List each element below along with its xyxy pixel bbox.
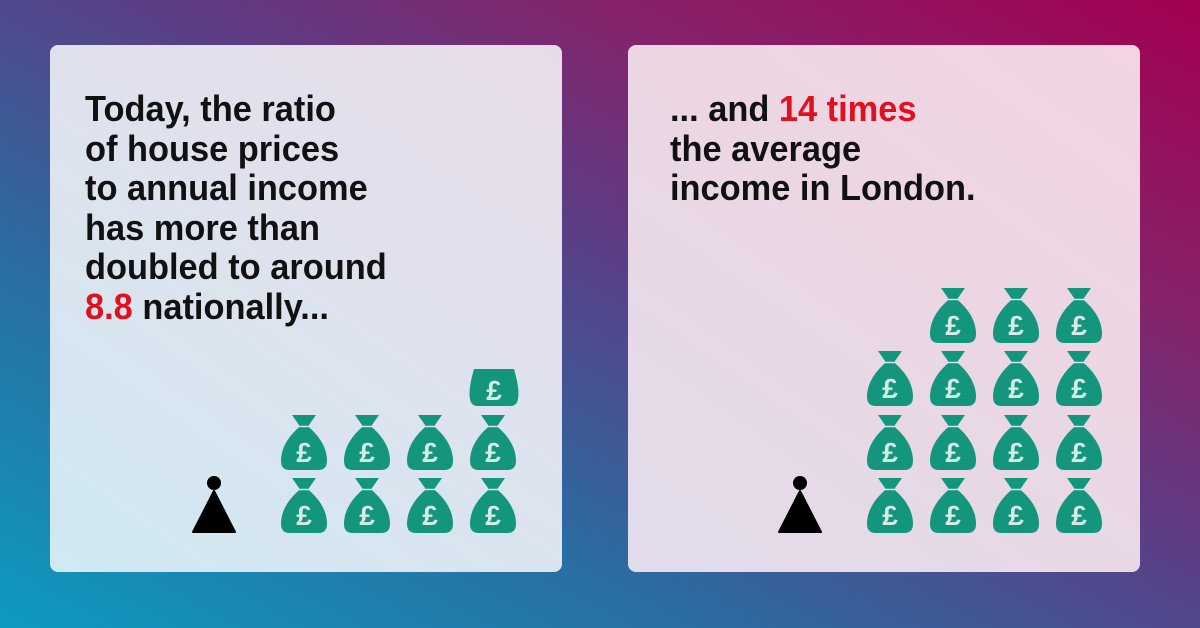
icon: bags grid: £ [486,375,502,406]
icon: bags grid [867,288,1102,533]
text block: London [670,88,976,208]
text block: national: Today, the ratio [85,88,336,129]
text block: national [85,88,387,326]
icon: bags grid [281,369,518,533]
text block: national: of house prices [85,128,339,168]
text block: national: to annual income [85,167,368,208]
icon: person [779,476,821,532]
panel: London ratio [628,45,1140,572]
chart: money bags London [778,288,1102,533]
text block: London: ... and 14 times [670,88,916,129]
chart: money bags national [192,369,518,533]
panel: national ratio [50,45,562,572]
icon: person [193,476,235,532]
text block: London: the average [670,128,861,168]
text block: national: has more than [85,206,320,248]
text block: national: doubled to around [85,246,387,287]
text block: London: income in London. [670,167,976,208]
text block: national: 8.8 nationally... [85,286,329,326]
